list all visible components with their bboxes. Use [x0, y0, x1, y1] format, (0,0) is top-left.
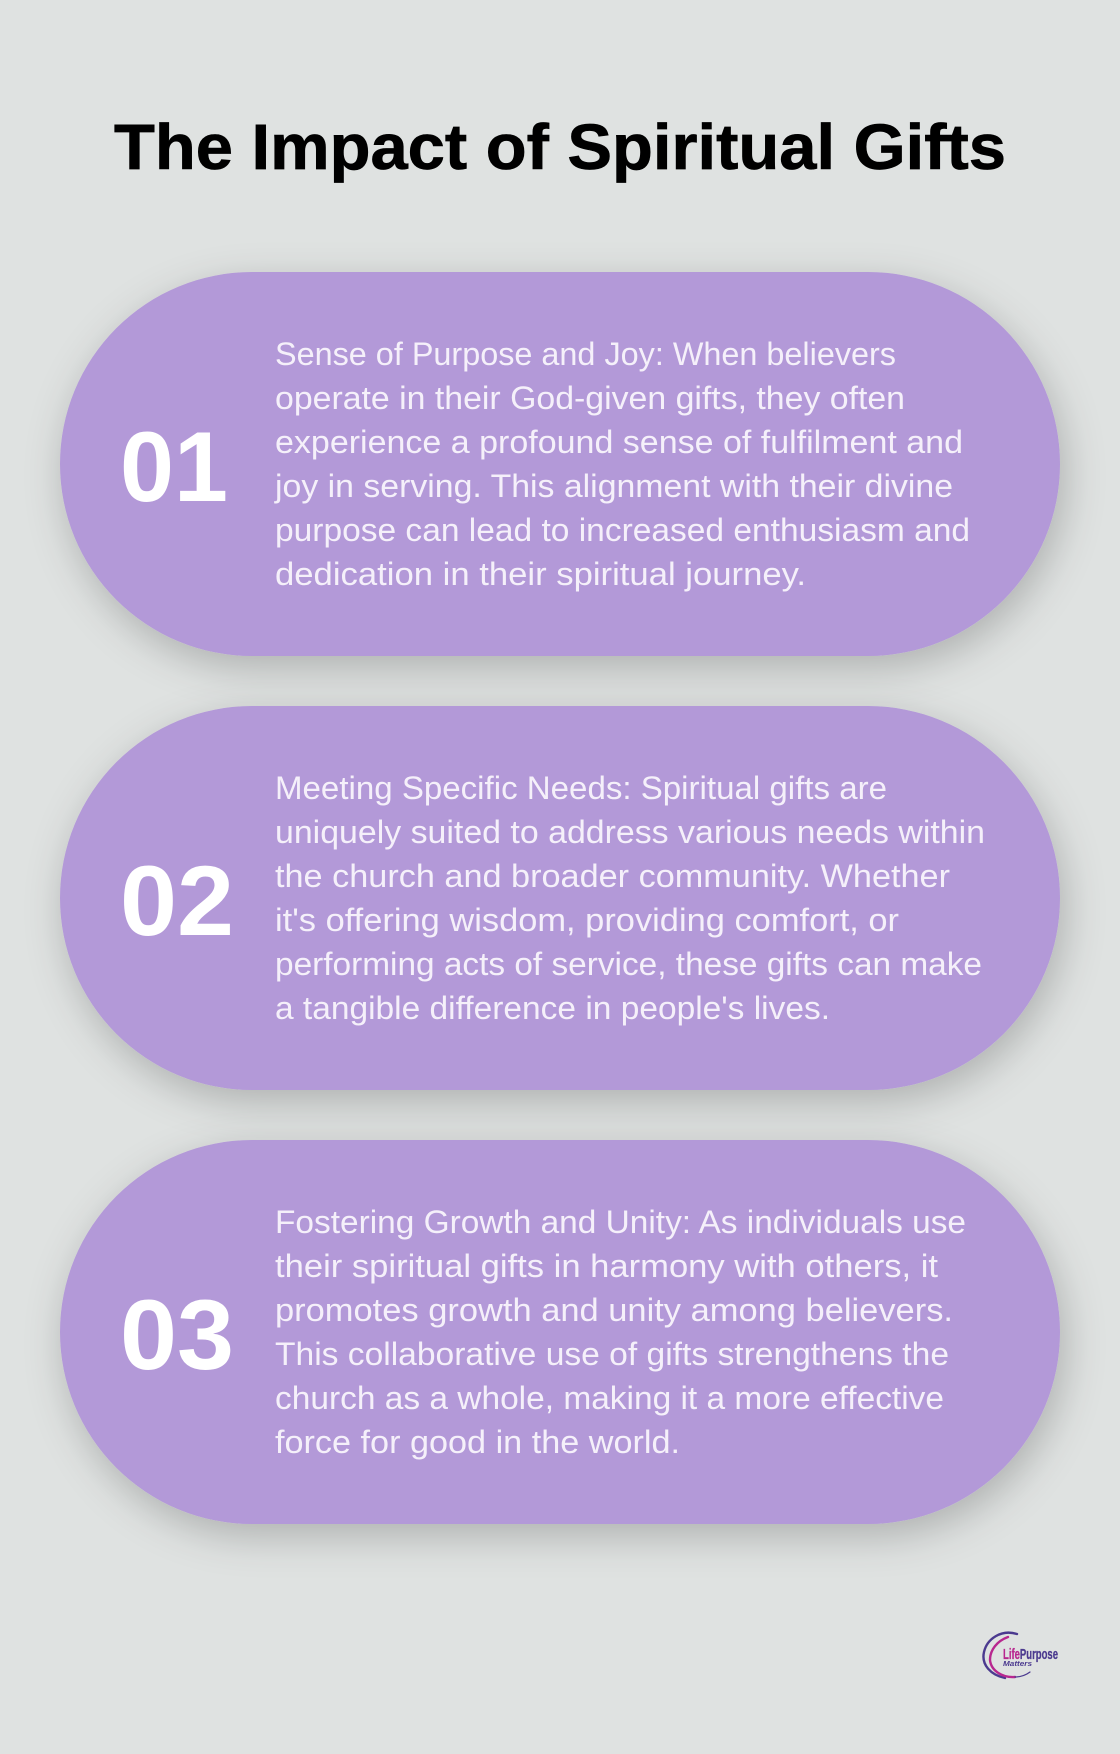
panel: sense of purpose and joy — [60, 272, 1060, 656]
number 02: 02 — [120, 845, 234, 956]
number 01: 01 — [120, 411, 228, 522]
text block 3: their spiritual gifts in harmony with others, it — [275, 1248, 938, 1284]
logo: Life Purpose Matters — [983, 1633, 1058, 1678]
text block 2: Meeting Specific Needs: Spiritual gifts are — [275, 770, 887, 806]
text block 1: experience a profound sense of fulfilment and — [275, 424, 963, 460]
text block 3: Fostering Growth and Unity: As individuals use — [275, 1204, 966, 1240]
text block 2: it's offering wisdom, providing comfort, or — [275, 902, 899, 938]
text block 2: a tangible difference in people's lives. — [275, 990, 830, 1026]
pill background 2 — [60, 706, 1060, 1090]
pill background 1 — [60, 272, 1060, 656]
text block 1 — [274, 336, 970, 592]
text block 1: purpose can lead to increased enthusiasm and — [275, 512, 970, 548]
text block 1: dedication in their spiritual journey. — [275, 556, 806, 592]
logo wordmark: LifePurpose — [1003, 1646, 1058, 1663]
panel: meeting specific needs — [60, 706, 1060, 1090]
text block 3: church as a whole, making it a more effective — [275, 1380, 944, 1416]
text block 2: uniquely suited to address various needs within — [275, 814, 985, 850]
number 03: 03 — [120, 1279, 234, 1390]
icon: logo arcs — [983, 1633, 1030, 1678]
text block 2 — [275, 770, 985, 1026]
text block 3 — [275, 1204, 966, 1460]
text block 2: performing acts of service, these gifts can make — [275, 946, 982, 982]
logo tagline: Matters — [1003, 1661, 1032, 1668]
text block 3: force for good in the world. — [275, 1424, 680, 1460]
text block 2: the church and broader community. Whether — [275, 858, 950, 894]
text block 1: joy in serving. This alignment with their divine — [274, 468, 953, 504]
panel: fostering growth and unity — [60, 1140, 1060, 1524]
text block 1: Sense of Purpose and Joy: When believers — [275, 336, 896, 372]
text block 3: This collaborative use of gifts strengthens the — [275, 1336, 949, 1372]
text block 3: promotes growth and unity among believers. — [275, 1292, 953, 1328]
pill background 3 — [60, 1140, 1060, 1524]
title: The Impact of Spiritual Gifts — [114, 111, 1006, 183]
text block 1: operate in their God-given gifts, they often — [275, 380, 905, 416]
